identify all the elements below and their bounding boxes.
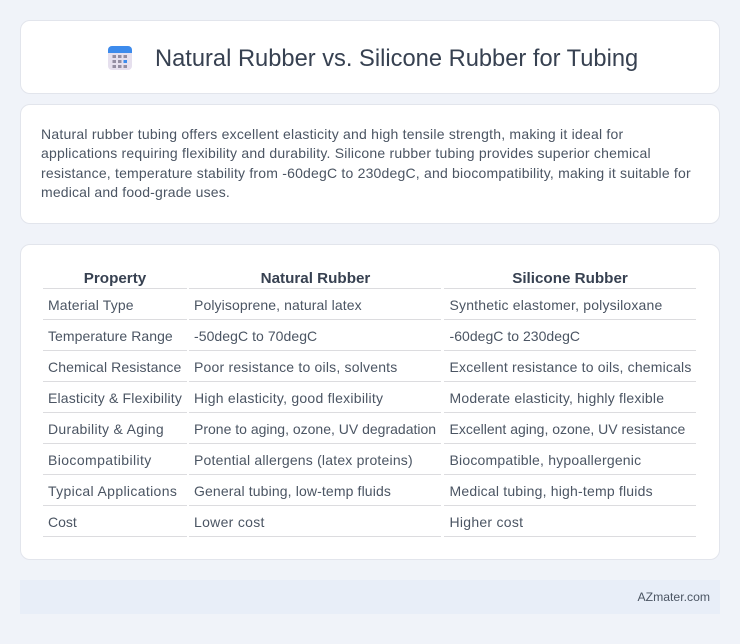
- row: material type: Synthetic elastomer, polysiloxane: [450, 297, 662, 313]
- text block: summary: Natural rubber tubing offers excellent elasticity and high tensile strength, making it ideal for: [41, 126, 623, 142]
- row: typical applications: General tubing, low-temp fluids: [194, 483, 391, 499]
- table header: Property: [84, 270, 146, 287]
- row: durability and aging: Durability & Aging: [48, 421, 164, 437]
- row: elasticity and flexibility: Elasticity & Flexibility: [48, 390, 182, 406]
- text block: summary: [41, 126, 691, 200]
- row: temperature range: Temperature Range: [48, 328, 173, 344]
- row: chemical resistance: Excellent resistance to oils, chemicals: [450, 359, 692, 375]
- text block: summary: applications requiring flexibility and durability. Silicone rubber tubing provides superior chemical: [41, 145, 651, 161]
- table header: [84, 270, 628, 287]
- row: chemical resistance: Chemical Resistance: [48, 359, 181, 375]
- row: durability and aging: [48, 421, 685, 437]
- row: chemical resistance: Poor resistance to oils, solvents: [194, 359, 397, 375]
- row: biocompatibility: [48, 452, 641, 468]
- row: material type: [48, 297, 662, 313]
- text block: summary: medical and food-grade uses.: [41, 184, 230, 200]
- footer bar: [20, 580, 720, 614]
- row: material type: Polyisoprene, natural latex: [194, 297, 362, 313]
- row: chemical resistance: [48, 359, 692, 375]
- row: typical applications: [48, 483, 653, 499]
- row: typical applications: Medical tubing, high-temp fluids: [450, 483, 653, 499]
- row: cost: Lower cost: [194, 514, 265, 530]
- row: material type: Material Type: [48, 297, 134, 313]
- row: cost: [48, 514, 523, 530]
- panel: summary: [20, 104, 720, 224]
- row: elasticity and flexibility: Moderate elasticity, highly flexible: [450, 390, 664, 406]
- row: durability and aging: Prone to aging, ozone, UV degradation: [194, 421, 436, 437]
- row: biocompatibility: Biocompatible, hypoallergenic: [450, 452, 641, 468]
- row: biocompatibility: Potential allergens (latex proteins): [194, 452, 413, 468]
- row: elasticity and flexibility: [48, 390, 664, 406]
- panel: title card: [20, 20, 720, 94]
- text block: summary: resistance, temperature stability from -60degC to 230degC, and biocompatibility, making it suitable for: [41, 165, 691, 181]
- row: elasticity and flexibility: High elasticity, good flexibility: [194, 390, 383, 406]
- icon: calendar: [108, 46, 132, 70]
- table header: Natural Rubber: [261, 270, 370, 287]
- row: cost: Cost: [48, 514, 77, 530]
- table header: Silicone Rubber: [512, 270, 628, 287]
- row: temperature range: [48, 328, 580, 344]
- title: Natural Rubber vs. Silicone Rubber for Tubing: [155, 46, 638, 72]
- row: typical applications: Typical Applications: [48, 483, 177, 499]
- row: temperature range: -60degC to 230degC: [450, 328, 580, 344]
- row: biocompatibility: Biocompatibility: [48, 452, 152, 468]
- panel: comparison table: [20, 244, 720, 560]
- row: durability and aging: Excellent aging, ozone, UV resistance: [450, 421, 685, 437]
- footer brand: AZmater.com: [638, 590, 710, 604]
- row: temperature range: -50degC to 70degC: [194, 328, 317, 344]
- row: cost: Higher cost: [450, 514, 523, 530]
